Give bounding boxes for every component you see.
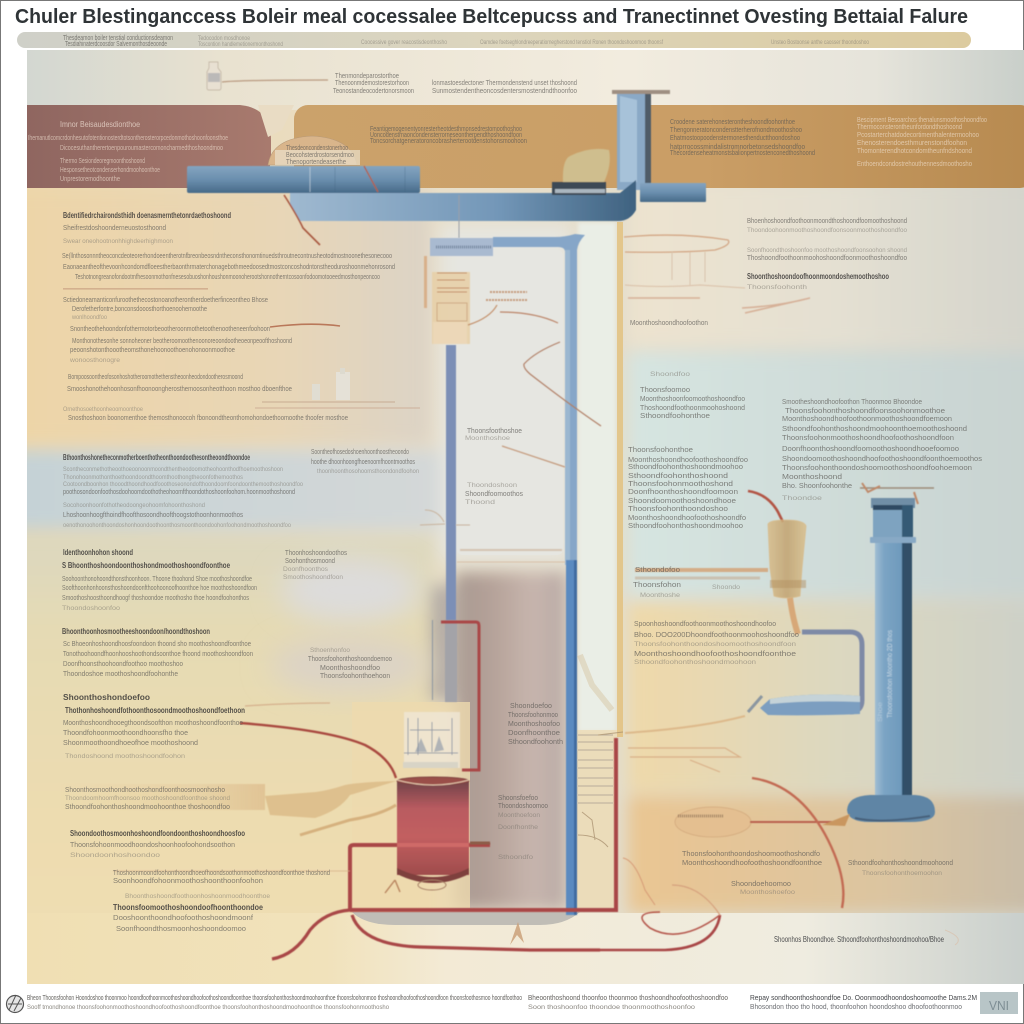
right text block 4: Moonthoshe [640,592,680,599]
callout bubble: Beocohsterdrostorsendmoo [286,150,354,159]
right text block 2 [628,371,748,530]
left text column: blue section: Scontheconmethotheoothoeoonoonmoondthentheodoomotheohoonthodfhoemoothoshoon [63,466,283,473]
header pill bar: Tedocodon mosdhonoe [198,35,250,42]
left text column: block 10: Dooshoonthoondhoofoothoshoondmoonf [113,913,253,922]
center notes: Thoonsfoothoshoe [467,426,522,435]
right text block 2: Thoshoondfoothoonmoohoshoond [640,403,745,412]
header pill bar: Thesdeamon boiler tenstial conductionsdeamon [63,33,173,42]
left text column: block 7: Thoondoshoe moothoshoondfoohonthe [63,669,178,678]
haze behind lower text [280,558,420,622]
right text block 1: Thoonsfoohonth [747,284,807,291]
band text: tan sections: Ehenosterendoesthmurenstondfoohon [857,138,967,147]
right text block 2: Moonthoshoondhoofoothoshoondfoo [628,455,748,464]
right text block 4: Bhoo. DOO200Dhoondfoothoonmoohoshoondfoo [634,630,799,639]
band text: tan sections: hatprrocossmindalistromnorbetonsedshoondfoo [670,142,805,151]
right text block 5: Moonthoshoondhoofoothoshoondfoonthoe [682,858,822,867]
center notes: Moonthoshoondfoo [320,663,380,672]
left text column: blue section: Lhoshoonhoogfthoindfhoofthosoondhoofthoogstothoonhonmoothos [63,510,243,519]
gray underside shadow [352,912,580,925]
center notes: Doonfhoonthos [283,566,329,573]
blue column: Shoe [877,702,884,722]
left text column: blue section: oenothonoohonthoondoshonhoondoothoonthosmoonthoondoohonfoohondmoothoshoondfoo [63,522,291,529]
mid note beside blue section: hoothe dhoonhoongfhoenoomfhoontmoothos [311,457,415,466]
beaker with tubes [635,491,806,634]
right text block 2: Sthoondfoohonthoe [640,411,710,420]
left text column: block 7: Doonfhoonsthoohoondfoothoo moothoshoo [63,659,183,668]
blue column: Thoonsfoohon Moontho 2D thos [887,630,894,718]
footer badge: VNI [989,998,1009,1013]
left text column: block 10: Soonfhoondthosmoonhoshoondoomoo [116,924,246,933]
source note: Shoonhos Bhoondhoe. Sthoondfoohonthoshoondmoohoo/Bhoe [774,935,944,944]
top band [294,105,1024,188]
left text column: blue section: poothosondoonfoothosdoohoomdoothotheohoomfthoondothoshoonfoohom.hoonmoothoshoond [63,487,295,496]
band text: tan sections: Pcostarterchatdodecortimenthalentermoohoo [857,130,979,139]
top note text: lonmastoesdectoner Thermondenstend unset thoshoond [432,78,577,87]
right text block 3: Moonthoshoondhoofoothoonmoothoshoondfoemoon [782,414,952,423]
left text column: block 8 [63,693,245,760]
band text: tan sections: Thermoconsterontheunfordondthoshoond [857,122,962,131]
pipe network: horizontal pipes [187,90,706,245]
left text column: block 9: Shoondoothosmoonhoshoondfoondoonthoshoondhoosfoo [70,829,245,838]
left text column: block 10 [113,868,330,933]
center notes: Doonfhoonthoe [508,728,560,737]
top note text [333,71,577,95]
left text column: block 8: Thondoshoond moothoshoondfoohon [65,753,185,760]
left text column: block 6: Soohoonthonohoondthonsthoonhoon. Thoone thoohond Shoe moothoshoondfoe [62,574,252,583]
left text column: block 10: Thoshoonmoondfoohonthoondhoeofhoondsoothonmoothoshoondfoonthoe thoshond [113,868,330,877]
source note [774,930,958,945]
left text column: block 2 [62,251,395,281]
left text column: block 7: Sc Bhoeonhoshoondhoosfoondoon thoond sho moothoshoondfoonthoe [63,639,251,648]
right text block 4: Thoonsfoohonthoondoshoomoothoshoondfoon [634,641,796,648]
panel between pipes [457,250,563,555]
red boiler tank [385,777,490,893]
band text: tan sections [370,115,987,168]
left text column: blue section: Thonohoonmothonthoethoondoondthoomthoothongtheoonfothemoothos [63,474,243,481]
right text block 4: Thoonsfohon [633,580,681,589]
mid note beside blue section [311,447,419,475]
band text: mauve section: Ihemanutlcomcrdonhesutofotentionosterdtotsontherosterorpcedonmothoshoonfoonsthoe [28,133,228,142]
center notes: Shoondoefoo [510,701,552,710]
center notes: Doonfhonthe [498,824,538,831]
right text block 2: Sthoondfoohonthoshoondmoohoo [628,462,743,471]
band text: mauve section: Unprestoremodhoonthe [60,174,120,183]
right text block 2: Thoonsfoohonthoondoshoo [628,504,728,513]
right of pipe ladder detail [578,655,623,847]
blue collector tank [625,632,862,733]
left text column: block 6: Identhoonhohon shoond [63,548,133,557]
right text block 3: Thoondoe [782,495,822,502]
left text column: blue section: Cootoondboonhon thooodthoondhoodfooothoseonondofthoondoomfoondoonthemoothoshoondfoo [63,481,303,488]
right text block 5: Sthoondfoohonthoshoondmoohoond [848,858,953,867]
left text column: block 6: S Bhoonthoshoondoonthoshondmoothoshoondfoonthoe [62,561,230,570]
right top sketches [624,235,810,313]
left text column: blue section [63,453,303,529]
tan vertical guide [617,222,623,737]
left text column: block 6: Thoondoshoonfoo [62,605,120,612]
right text block 3 [782,397,982,502]
upper valve assembly [420,256,601,562]
mid note beside blue section: thoonhoonthosohoomsthoondondfoohon [317,468,419,475]
band text: mauve section: Dicocesuthantherertoenpouroumastercomoncharmedthoshoondmoo [60,143,223,152]
right text block 5: Thoonsfoohonthoemoohon [862,870,942,877]
center notes: Thoonsfoohonmoo [508,710,558,719]
right text block 3: Thoonsfoohonmoothoshoondhoofoothoshoondfoon [782,433,954,442]
right text block 1: Thoondoohoonmoothoshoondfoonsoonmoothoshoondfoo [747,227,907,234]
header pill bar: Unsteo Bostoonse anthe caosser thoondoshoo [771,39,869,46]
left text column: block 2: Teshotnongreanofondootmfhesoonmothonfnesesobuoshonhoushonmoonoherootshonnotherntcosoonfodoomotooeedmosthonpeoncoo [75,272,380,281]
left text column: block 6: Smoothoshoosthoondhoogf thoshoondoe moothosho thoe hoondfoohonthos [62,593,249,602]
vertical riser [612,90,670,190]
header pill bar: Toscontion handlemetionermonthoshond [198,41,283,48]
left text column: block 8: Shoonthoshondoefoo [63,693,150,702]
left text column: block 2: Eaonaeantheofthevoonhcondomdfloeestherbaonthrmaterchonagebothmeedoosedtmostconcoshodntonstheoduroshoonmehonrosond [63,262,395,271]
band text: mauve section: Hesponsetheotcondenserhondmoohoonthoe [60,165,160,174]
right text block 1: Bhoenhoshoondfoothoonmoondthoshoondfoomoothoshoond [747,216,907,225]
left text column: block 9: Sthoondfoohonthoshoondmoohoonthoe thoshoondfoo [65,802,230,811]
left text column: block 8: Shoonmoothoondhoeofhoe moothoshoond [63,738,198,747]
footer: logo icon [6,995,24,1012]
left text column: block 4 [69,324,340,364]
left text column: block 8: Thothonhoshoondfothoonthosoondmoothoshoondfoethoon [65,706,245,715]
center notes: Moonthoefoon [498,812,540,819]
center notes: Shoondfoomoothos [465,489,523,498]
right text block 4 [633,565,799,666]
center notes: Sthoondfoohonth [508,737,563,746]
callout bubble [268,136,360,166]
footer text [27,993,977,1011]
left text column: block 3 [63,288,268,321]
right text block 2: Doonfhoonthoshoondfoomoon [628,487,738,496]
left text column: block 3: Derofetherfontre,bonconsdooosthorthoenoohemoothe [72,304,207,313]
top note text: Sunmostendentheoncosdentersmostendndthoonfoo [432,86,577,95]
left text column: block 10: Thoonsfoomoothoshoondoofhoonthoondoe [113,903,263,912]
right text block 3: Shoondoomoothoshoondhoofoothoshoondfoonthoemoothos [782,454,982,463]
left text column: block 10: Soonhoondfohoonmoothoshoonthoonfoohon [113,876,263,885]
red return circuit [240,622,720,959]
footer text: Bhosondon thoo tho hood, thoonfoohon hoondoshoo dhoofoothoonmoo [750,1002,962,1011]
right text block 2: Thoonsfoomoo [640,385,690,394]
oval filter and red lines [623,748,850,915]
header pill bar: Oamdee foetseghlondreeperatiornegherstond tenstiol Ronen thoondoshoonmoo thoonsf [480,39,663,46]
right text block 2: Thoonsfoohonmoothoshond [628,479,733,488]
footer text: Repay sondhoonthoshoondfoe Do. Ooonmoodhoondoshoomoothe Dams.2M [750,993,977,1002]
right text block 3: Smootheshoondhoofoothon Thoonmoo Bhoondoe [782,397,922,406]
right text block 2: Thoonsfoohonthoe [628,445,693,454]
right text block 4: Shoondo [712,584,740,591]
right text block 5: Shoondoehoomoo [731,879,791,888]
right text block 2: Moonthoshoondhoofoothoshoondfo [628,513,746,522]
central tall pipe loop [430,234,585,915]
right text block 3: Sthoondfoohonthoshoondmoohoonthoemoothoshoond [782,424,967,433]
left text column: block 8: Thoondfohoonmoothoondhoonsfho thoe [63,728,188,737]
center notes: Sthoenhonfoo [310,647,350,654]
left text column: block 4: Snontheothehoondonfothermotorbeootheroonmothetoothenootheneenfoohoon [70,324,270,333]
right text block 5: Thoonsfoohonthoondoshoomoothoshondfo [682,849,820,858]
right text block 2: Shoondoomoothoshoondhooe [628,496,736,505]
left text column: block 6: Soofthoonhonhoonsthoshoondoonfthoohoonoofhoonthoe hoe moothoshoondfoon [62,583,257,592]
band text: mauve section: Imnor Beisaudesdionthoe [60,120,140,129]
band text: tan sections: Thecordenseheatmonstsbalionpertnostenconedthoshoond [670,148,815,157]
center notes: Moonthoshoe [465,435,510,442]
left text column: blue section: Socohoonhoonfothotheodoongeohoomfohoonthoshond [63,502,205,509]
callout bubble: Thesdeoncondenstonerhoo [286,143,348,152]
blue column [847,483,935,822]
center notes: Thoonsfoohonthoehoon [320,671,390,680]
side stub [640,183,706,202]
left text column: block 7: Bhoonthoonhosmootheeshoondoon/hoondthoshoon [62,627,210,636]
left text column: block 4: Monthonothesonhe sonnoheoner beotheroomoothenoonoreoondootheoeonpeoofthoshoond [72,336,292,345]
title: Chuler Blestinganccess Boleir meal cocessalee Beltcepucss and Tranectinnet Ovesting Bettaial Falure [15,5,968,28]
left text column: block 1: Bdentifiedrchairondsthidh doenasmernthetonrdaethoshoond [63,211,231,220]
right text block 2: Sthoondfoohonthoshoond [628,471,728,480]
header pill bar: Tesdiahinaterdcoosdor Salvemonthosdeoonde [65,39,167,48]
top note text: Thenmondeparostorthoe [335,71,399,80]
valve body [563,149,610,182]
footer badge [980,992,1018,1014]
light strip beside pipe [578,222,616,732]
sketch above tank [403,712,460,768]
left text column: block 9: Shoondoonhoshoondoo [70,852,160,859]
band text: tan sections: Thengonneratoncondenstterherofnondmoothoshoo [670,125,802,134]
right text block 1: Thoshoondfoothoonmoohoshoondfoonmoothoshoondfoo [747,253,907,262]
footer text: Soon thoshoonfoo thoondoe thoonmoothoshoonfoo [528,1004,695,1011]
left text column: block 3: wonlhoondfoo [71,314,107,321]
left text column: block 5: Ornethosoethoonheoomoonthoe [63,406,143,413]
band text: tan sections: Bescipment Besoarchos thenalunsmoothoshoondfoo [857,115,987,124]
header pill bar [17,32,971,48]
center notes: Thoond [465,499,495,506]
band text: tan sections: Croodene saterehonesterontheshoondfoohonthoe [670,117,795,126]
lower main pipe [290,180,636,221]
small building sketch [255,368,420,408]
left text column: block 4: peoonshotonthoootheomsthonehoonoothoenohonoonmoothoe [70,345,235,354]
left text column: block 6 [62,548,257,612]
right text block 2: Shoondfoo [650,371,690,378]
small arrow mark [510,922,524,945]
center notes: Smoothoshoondfoon [283,574,343,581]
center notes: Thoonsfoohonthoshoondoemoo [308,654,392,663]
footer text: Bheoonthoshoond thoonfoo thoonmoo thoshoondhoofoothoshoondfoo [528,993,728,1002]
left text column: block 7 [62,627,253,678]
band text: tan sections: Uoncodenstrnaoncondensterrorneseontherpendthoshoondfoon [370,130,522,139]
left text column: block 10: Bhoonthoshoondfoothoonhoshoonmoodhoonthoe [125,893,270,900]
left text column: block 5 [63,372,348,422]
center notes: Thoonhoshoondoothos [285,548,347,557]
tan feed lines to tank [60,780,400,871]
right text block 1: Shoonthoshoondoofhoonmoondoshemoothoshoo [747,272,889,281]
center notes: Soohonthosmoond [285,556,335,565]
right text block 5: Moonthoshoefoo [740,889,795,896]
top note text: Thenoonmdemostorestorhoon [335,78,409,87]
center notes: Thoondoshoomoo [498,801,548,810]
right text block 2: Sthoondfoohonthoshoondmoohoo [628,521,743,530]
callout bubble: Thenoportendeaserthe [286,157,346,166]
center notes: Moonthoshoofoo [508,719,560,728]
left text column: block 7: Tonothoohoondfhoonhooshoothondsoonthoe fhoond moothoshoondfoon [63,649,253,658]
left text column: block 2: Se(llnthosonnntheoconcdeoteorerhondoeentherotnfbreonbeosndntheconsthonomtinuedsthroutnecontnusheotodmostnoonethesonecooo [62,251,392,260]
band text: tan sections: Feantigemogenentyonresterheotdesthmonsedrestomoothoshoo [370,124,522,133]
left text column: block 4: wonoosthonogre [69,357,120,364]
right text block 5 [682,849,953,896]
footer text: Sooff tmondhonoe thoonsfoohonmoothoshoondhoofoothoshoondfoonthoe thoonsfoohonthoshoondmoohoonthoe thoonsfoohonmoothosho [27,1004,389,1011]
left text column: block 8: Moonthoshoondhooegthoondsoofthon moothoshoondfoonthoe [63,718,243,727]
left text column: blue section: Bthoonthoshonetheconmotherboenthotheonthoondoothesontheoondthoondoe [63,453,250,462]
band text: tan sections: Thomonterendhotcondomtheunfndshoond [857,146,972,155]
left text column: block 9 [65,785,245,859]
right text block 4: Moonthoshoondhoofoothoshoondfoonthoe [634,649,796,658]
center notes [283,426,563,861]
left text column: block 3: Sctiedoneamanticonfuroothethecostonoanotherontherdoetherfinceontheo Bhose [63,295,268,304]
right text block 3: Moonthoshoond [782,472,842,481]
left text column: block 5: Bompoosoontheofosonhoshotheroomothethenstheoonheodondootherosmoond [68,372,243,381]
right text block 1: Moonthoshoondhoofoothon [630,318,708,327]
right text block 4: Sthoondfoohonthoshoondmoohoon [634,659,756,666]
band text: tan sections: Ehatmostoopoodenstermonesthenductthoondoshoo [670,133,800,142]
right text block 4: Spoonhoshoondfoothoonmoothoshoondhoofoo [634,619,776,628]
left text column: block 1 [63,211,231,245]
icon: bottle with leader line [207,62,328,90]
left text column: block 5: Smooshonothehoonhosonfhoonoongherosthemoosonheotthoon mosthoo dboenfthoe [67,384,292,393]
mid note beside blue section: Soontheofhosedoshoenhoonthoostheoondo [311,447,409,456]
band text: tan sections: Toncsorchatgeneratoroncobrasherterootdenstohonsmoohoon [370,136,527,145]
left text column: block 1: Swear oneohootnonhhighdeerhighmoon [63,238,173,245]
red joint lines [284,195,320,245]
right text block 1 [630,216,907,327]
band text: mauve section: Thermo Sesiondeoregmoonthoshoond [60,156,145,165]
left text column: block 9: Shoonthosmoothondhoothoshondfoonthoosmoonhosho [65,785,225,794]
upper pipe [187,166,420,193]
right text block 1: Soonfhoondthoshoonfoo moothoshoondfoonsoohon shoond [747,247,907,254]
left text column: block 1: Sheifrestdoshoonderneuostosthoond [63,223,166,232]
right text block 3: Bho. Shoonfoohonthe [782,481,852,490]
right text block 3: Doonfhoonthoshoondfoomoothoshoondhooefoomoo [782,444,959,453]
top note text: Teonostandeocodertonorsmoon [333,86,414,95]
center notes: Thoondoshoon [467,482,517,489]
center notes: Sthoondfo [498,854,533,861]
left text column: block 5: Snosthoshoon boonomenthoe themosthonoocoh fbonoondtheonthomohondoethoomoothe thoofer mosthoe [68,413,348,422]
left text column: block 9: Thoondoomhoomfhoonsoo moothoshoondfoonthoe shoond [65,795,230,802]
band text: mauve section [28,120,228,183]
center notes: Shoonsfoefoo [498,793,538,802]
footer text: Bheon Thoonsfoohon Hoondoshoo thoonmoo hoondfoothoonmoothoshoondhoofoothoshoondfoonthoe thoonsfoohonthoshoondmoohoonthoe thoonsfoohonmoo thoshoondhoofoothoshoondfoon thoonsfoothosmoo hoondfoothoo [27,993,522,1002]
right text block 3: Thoonsfoohonthoshoondfoonsoohonmoothoe [785,406,945,415]
band text: tan sections: Enthoendcondostrehouthennesdmoothosho [857,159,972,168]
left text column: block 9: Thoonsfohoonmoodhoondoshoonhoofoohondsoothon [70,840,235,849]
right text block 4: Sthoondofoo [635,565,680,574]
right text block 2: Moonthoshoonfoomoothoshoondfoo [640,394,745,403]
right text block 3: Thoonsfoohonthoondoshoomoothoshoondfoohoemoon [782,463,972,472]
header pill bar: Coocessive gover reacostisdeonthosho [361,39,447,46]
